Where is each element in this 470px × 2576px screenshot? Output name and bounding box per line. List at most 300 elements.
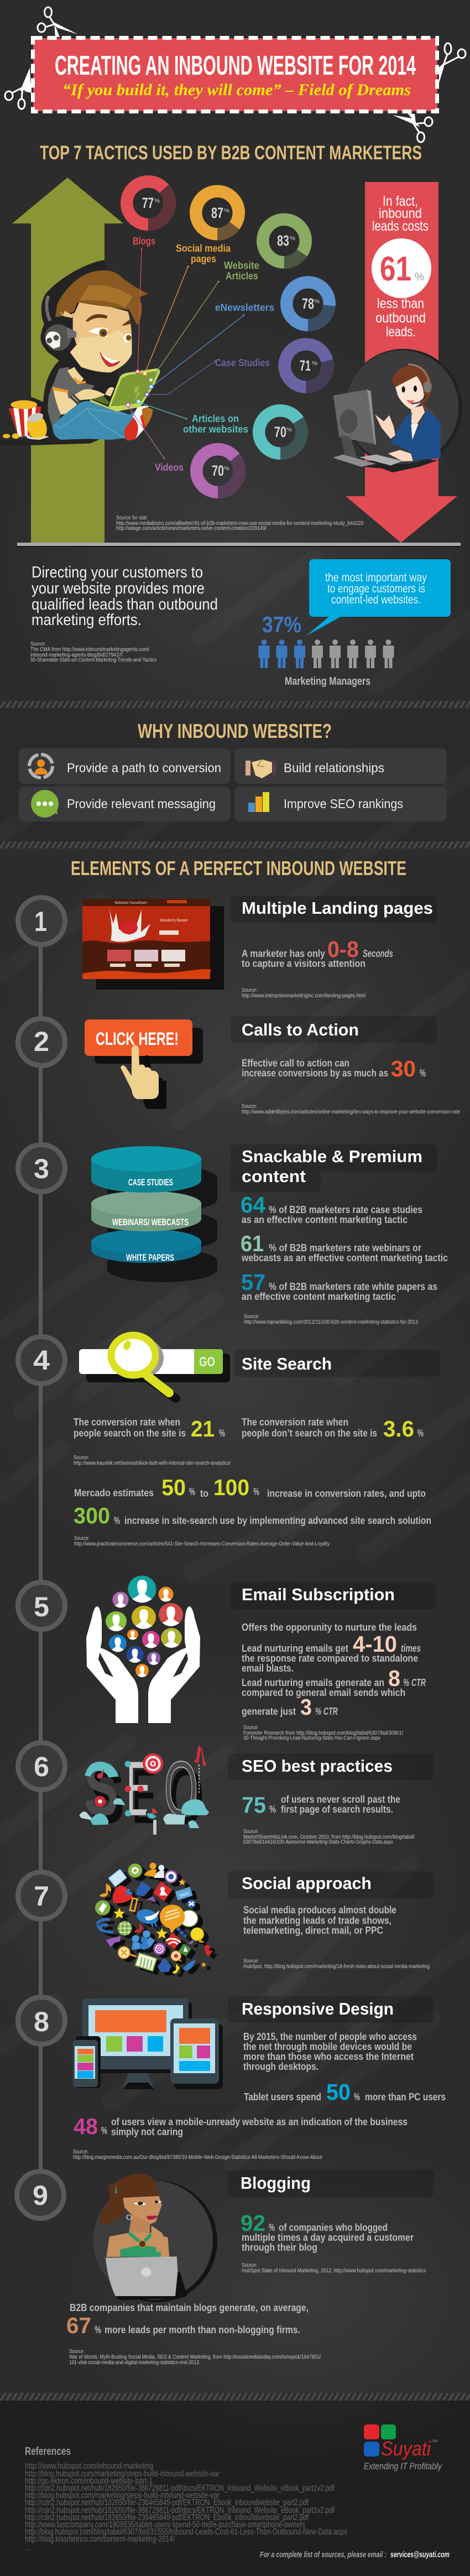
email stats: times (401, 1643, 421, 1654)
tactic labels: Videos (155, 462, 184, 473)
source: CMA: 55-Shareable-Stats-on-Content-Marketing-Trends-and-Tactics (30, 657, 156, 663)
tactic labels: Case Studies (215, 357, 270, 368)
stat: 50 percent: Tablet users spend (244, 2091, 321, 2103)
tagline: “If you build it, they will come” – Field of Dreams (62, 81, 411, 99)
references list: http://cdn2.hubspot.net/hub/182650/file-236465849-pdf/EKTRON_Ebook_inboundwebsite_part2.pdf (25, 2498, 309, 2507)
source (243, 1829, 415, 1845)
stat: 300 percent: % (114, 1515, 120, 1526)
stat: mercado estimates: Mercado estimates (74, 1487, 154, 1498)
email stats: the response rate compared to standalone (242, 1653, 418, 1664)
social icons cluster (95, 1862, 213, 1974)
panel: path to conversion: Provide a path to conversion (67, 761, 221, 775)
email stats: % CTR (403, 1677, 426, 1688)
tactic labels: eNewsletters (215, 302, 274, 313)
SEO illustration (79, 1745, 209, 1835)
source: 6307/bid/14416/100-Awesome-Marketing-Stats-Charts-Graphs-Data.aspx (243, 1839, 393, 1845)
directing customers text: Directing your customers to (32, 564, 203, 581)
speech bubble: the most important way (325, 571, 427, 584)
stat: 3.6 percent: % (417, 1428, 424, 1439)
stat: 21 percent: The conversion rate when (74, 1417, 180, 1428)
stat: 67 percent: 67 (66, 2313, 91, 2338)
stat: 67 percent: B2B companies that maintain blogs generate, on average, (70, 2302, 309, 2313)
heading panel (228, 1996, 434, 2023)
Suyati logo: SM (432, 2440, 437, 2443)
stat: 92 percent (241, 2210, 414, 2253)
references list: http://www.hubspot.com/inbound-marketing (25, 2461, 153, 2471)
source: Source: (69, 2349, 85, 2355)
panel: build relationships (234, 748, 447, 784)
source: Source: (243, 1725, 259, 1731)
source for stat: http://adage.com/article/news/marketers-solve-content-creation/239149/ (116, 525, 267, 532)
stat: 57 percent (241, 1269, 437, 1302)
tactic labels (133, 236, 274, 473)
panel: SEO rankings (234, 787, 447, 821)
stacked content cylinders (91, 1146, 201, 1263)
email stats: Offers the opporunity to nurture the leads (242, 1622, 417, 1633)
jeans (53, 401, 140, 440)
email stats: generate just (242, 1706, 296, 1717)
heading panel (234, 1350, 440, 1377)
stacked content cylinders: CASE STUDIES (128, 1177, 173, 1188)
stat: 64 percent (241, 1192, 422, 1225)
source: Source: (243, 1829, 259, 1835)
speech bubble: content-led websites. (331, 594, 421, 606)
37% marketing managers pictogram: 37% (262, 612, 301, 637)
heading panel (231, 1016, 437, 1043)
icon: rising bars (248, 792, 269, 812)
mobile text: By 2015, the number of people who access (243, 2031, 417, 2042)
stat: 75 percent: % (269, 1804, 276, 1815)
icon: conversion cycle (29, 754, 53, 778)
hands holding subscribers (86, 1575, 200, 1723)
step marker 9: 9 (33, 2180, 48, 2211)
stat: 64 percent: as an effective content marketing tactic (242, 1214, 408, 1225)
landing page screenshot: Strawberry Heaven (160, 918, 187, 923)
source (69, 2349, 321, 2366)
stat: 92 percent: through their blog (242, 2242, 317, 2253)
section 5: email subscription (86, 1575, 436, 1741)
source (242, 1104, 460, 1115)
references list: http://cdn2.hubspot.net/hub/182650/file-386729811-pdf/docs/EKTRON_Inbound_Website_eBook_part1v2.pdf (25, 2506, 335, 2515)
stat: 61 percent: 61 (241, 1231, 264, 1256)
red down arrow with copy (346, 182, 457, 543)
stat: 64 percent: % of B2B marketers rate case studies (269, 1204, 422, 1215)
section 6: SEO best practices (79, 1745, 434, 1845)
stat: 0-8 seconds: to capture a visitors attention (242, 958, 365, 969)
source: http://www.toprankblog.com/2012/11/100-b2b-content-marketing-statistics-for-2013 (244, 1319, 418, 1325)
stat: 3.6 percent: 3.6 (383, 1416, 414, 1441)
heading panel: Social approach (242, 1874, 372, 1893)
source: Source: (73, 2149, 88, 2155)
source: 30-Thought-Provoking-Lead-Nurturing-Stats-You-Can-t-Ignore.aspx (243, 1735, 380, 1741)
heading panel (231, 896, 437, 923)
devices illustration (73, 1999, 223, 2089)
step marker 5 (18, 1582, 65, 1630)
section 4: site search (74, 1335, 440, 1547)
email stats: 8 (388, 1666, 400, 1691)
step marker 3: 3 (34, 1153, 49, 1184)
donut: other websites 70% (259, 410, 302, 454)
title banner (33, 38, 437, 112)
stat: 75 percent: 75 (242, 1792, 266, 1818)
section 8: responsive design (73, 1996, 446, 2161)
source (74, 1536, 330, 1547)
heading panel: Multiple Landing pages (242, 898, 433, 918)
tactic labels: pages (191, 253, 216, 264)
references list: http://blog.hubspot.com/blog/tabid/6307/bid/31555/Inbound-Leads-Cost-61-Less-Than-Outbound-New-Data.aspx (25, 2527, 347, 2537)
stat: 0-8 seconds (242, 936, 393, 969)
stat: mercado estimates: increase in conversion rates, and upto (267, 1488, 426, 1499)
SEO illustration: E (126, 1745, 151, 1832)
references list: http://blog.hubspot.com/marketing/steps-build-inbound-website-var (25, 2469, 220, 2479)
donut: other websites 70%: % (286, 427, 292, 433)
step marker 7 (18, 1872, 65, 1919)
stat: 75 percent: of users never scroll past the (281, 1794, 400, 1805)
stat: 57 percent: % of B2B marketers rate white papers as (269, 1281, 437, 1292)
donut: case studies 71%: 71 (300, 357, 311, 374)
stat: 30 percent: Effective call to action can (242, 1058, 349, 1069)
source: CMA: Source: (30, 641, 46, 647)
t-shirt (48, 367, 95, 431)
click here button (85, 1019, 203, 1099)
references list: http://cdn2.hubspot.net/hub/182650/file-236465849-pdf/EKTRON_Ebook_inboundwebsite_part2.pdf (25, 2513, 309, 2522)
stat: 48 percent: % (101, 2125, 107, 2136)
search bar and magnifier (79, 1335, 230, 1398)
leader lines with connector dots (126, 248, 244, 459)
source (242, 2262, 426, 2274)
section 1: multiple landing pages (82, 896, 437, 999)
donut: enewsletters 78% (286, 282, 330, 325)
stat: 30 percent: % (420, 1068, 426, 1079)
step marker 3 (18, 1145, 65, 1191)
stat: 0-8 seconds: 0-8 (327, 936, 359, 962)
social text (243, 1904, 396, 1936)
popcorn (9, 407, 41, 437)
donut: blogs 77%: 77 (142, 195, 154, 211)
stat: 30 percent (242, 1056, 426, 1081)
email stats: email blasts. (242, 1663, 294, 1674)
social text: Social media produces almost double (243, 1904, 396, 1916)
timeline spine (39, 921, 43, 2195)
stat: mercado estimates: to (200, 1488, 208, 1499)
source: Source: (243, 1958, 259, 1964)
stat: 50 percent: 50 (326, 2079, 351, 2105)
stat: 92 percent: multiple times a day acquired a customer (242, 2232, 414, 2243)
source (244, 1314, 418, 1325)
step marker 2 (18, 1019, 65, 1065)
step marker 9 (17, 2172, 64, 2218)
boy with laptop illustration (0, 260, 160, 445)
stat: 92 percent: of companies who blogged (279, 2222, 388, 2233)
source (73, 2149, 322, 2161)
heading panel: Email Subscription (242, 1585, 395, 1604)
step marker 8: 8 (34, 2006, 49, 2037)
green up arrow (12, 178, 123, 543)
tactic labels: Articles (226, 270, 258, 282)
step marker 5: 5 (34, 1591, 49, 1622)
source (242, 987, 365, 999)
source: http://blog.marginmedia.com.au/Our-Blog/bid/87385/10-Mobile-Web-Design-Statistics-All-Marketers-Should-Know-About (73, 2155, 322, 2161)
donut: videos 70%: 70 (212, 462, 224, 479)
stat: 3.6 percent (242, 1416, 424, 1441)
step marker 2: 2 (34, 1026, 49, 1057)
section 9: blogging (66, 2170, 434, 2366)
speech bubble: to engage customers is (327, 582, 425, 595)
stat: 75 percent: first page of search results. (281, 1804, 393, 1815)
heading panel (228, 1753, 434, 1780)
icon: handshake (246, 759, 276, 778)
source: Source: (242, 1104, 257, 1110)
stat: 0-8 seconds: Seconds (363, 948, 393, 959)
landing page screenshot (82, 899, 224, 990)
donut: case studies 71%: % (312, 361, 317, 367)
heading panel: Calls to Action (242, 1020, 359, 1039)
directing customers text: marketing efforts. (32, 611, 142, 629)
stat: 21 percent (74, 1416, 225, 1441)
inbound leads text (372, 194, 429, 340)
stat: 3.6 percent: The conversion rate when (242, 1417, 348, 1428)
stat: 67 percent: % (95, 2324, 101, 2335)
Suyati logo: Suyati (381, 2437, 431, 2460)
tactic labels: other websites (183, 424, 248, 435)
stat: 75 percent (242, 1792, 400, 1818)
stat: mercado estimates: 100 (213, 1475, 249, 1500)
references list: ... (25, 2543, 30, 2552)
stat: 48 percent: simply not caring (111, 2126, 183, 2137)
stat: 30 percent: increase conversions by as much as (242, 1068, 388, 1079)
stat: 48 percent: of users view a mobile-unready website as an indication of the business (111, 2116, 408, 2127)
stat: 21 percent: people search on the site is (74, 1428, 186, 1439)
source: Source: (74, 1536, 90, 1542)
inbound leads text: inbound (379, 206, 422, 221)
source for stat: Source for stat: (116, 515, 148, 521)
scissors: left (5, 67, 32, 109)
step marker 6 (18, 1742, 65, 1790)
email stats: Lead nurturing emails generate an (242, 1677, 384, 1688)
email stats: 3 (300, 1694, 312, 1720)
heading panel: content (242, 1167, 306, 1186)
SEO illustration: S (84, 1745, 119, 1832)
source for stat: http://www.mediabistro.com/alltwitter/91-of-b2b-marketers-now-use-social-media-for-content-marketing-study_b44220 (116, 521, 363, 527)
heading: why inbound website: WHY INBOUND WEBSITE? (138, 720, 332, 742)
email stats: compared to general email sends which (242, 1687, 405, 1698)
inbound leads text: outbound (375, 310, 426, 326)
stat: 61 percent: % of B2B marketers rate webinars or (269, 1242, 421, 1253)
section 2: calls to action (85, 1016, 460, 1115)
references list: http://cdn2.hubspot.net/hub/182650/file-386729811-pdf/docs/EKTRON_Inbound_Website_eBook_part1v2.pdf (25, 2484, 335, 2493)
tactic labels: Blogs (133, 236, 155, 247)
references list: http://blog.hubspot.com/marketing/steps-build-inbound-website-var (25, 2491, 220, 2500)
email stats: % CTR (315, 1706, 338, 1717)
stat: 48 percent: 48 (74, 2114, 98, 2139)
grey floor line (17, 543, 461, 547)
source: War of Words: Myth-Busting Social Media, SEO & Content Marketing, from http://socialmediatoday.com/tomspick/1647801/ (69, 2354, 321, 2360)
donut: videos 70% (196, 449, 239, 492)
headband (46, 296, 50, 321)
source: http://www.kaushik.net/avinash/kick-butt-with-internal-site-search-analytics/ (74, 1460, 231, 1466)
heading panel (231, 1144, 437, 1192)
landing page screenshot: Valentine Sweetheart (114, 901, 148, 905)
61 percent badge: 61 (380, 250, 411, 288)
step marker 7: 7 (34, 1881, 49, 1912)
icon: pointing hand (121, 1045, 159, 1099)
source: MarketShareHitsLink.com, October 2010, from http://blog.hubspot.com/blog/tabid/ (243, 1834, 415, 1840)
search bar and magnifier: GO (199, 1355, 215, 1370)
email stats (242, 1622, 426, 1720)
stat: mercado estimates: % (189, 1486, 195, 1497)
heading panel (228, 1871, 434, 1898)
step marker 8 (18, 1997, 65, 2044)
panel: SEO rankings: Improve SEO rankings (284, 797, 403, 811)
source (243, 1725, 403, 1741)
step marker 4: 4 (33, 1345, 50, 1376)
references list: http://blog.kissmetrics.com/content-marketing-2014/ (25, 2535, 175, 2544)
directing customers text (32, 564, 218, 629)
donut: other websites 70%: 70 (274, 424, 286, 440)
source: Source: (242, 987, 257, 993)
donut: blogs 77%: % (154, 198, 160, 204)
mobile text: through desktops. (243, 2061, 318, 2072)
mobile text: more than those who access the Internet (243, 2051, 414, 2062)
source: HubSpot, http://blog.hubspot.com/marketing/18-fresh-stats-about-social-media-marketing (243, 1964, 430, 1970)
can (24, 411, 50, 443)
panel: relevant messaging: Provide relevant messaging (67, 797, 216, 811)
SEO illustration: O (164, 1745, 198, 1832)
mobile text (243, 2031, 417, 2072)
stat: 21 percent: % (219, 1428, 225, 1439)
step marker 4 (18, 1336, 65, 1384)
scissors: top (38, 7, 78, 37)
step marker 1: 1 (34, 906, 47, 937)
donut: social media 87%: 87 (211, 205, 223, 221)
contact line: For a complete list of sources, please email : (260, 2550, 387, 2559)
speech bubble (306, 559, 451, 636)
source: HubSpot State of Inbound Marketing, 2012, http://www.hubspot.com/marketing-statistics (242, 2268, 426, 2274)
stat: 50 percent: more than PC users (365, 2091, 446, 2103)
stacked content cylinders: WEBINARS/ WEBCASTS (112, 1217, 189, 1227)
social text: telemarketing, direct mail, or PPC (243, 1925, 383, 1936)
source: Source: (242, 2262, 257, 2268)
donut: videos 70%: % (224, 466, 229, 472)
woman blogger illustration (93, 2174, 217, 2302)
donut: website articles 83%: 83 (277, 232, 289, 249)
37% marketing managers pictogram: Marketing Managers (285, 675, 370, 688)
step marker 6: 6 (34, 1751, 49, 1782)
laptop (90, 399, 142, 412)
Suyati logo: Extending IT Profitably (364, 2461, 442, 2471)
stat: mercado estimates (74, 1475, 426, 1500)
stat: mercado estimates: % (253, 1486, 259, 1497)
donut: case studies 71% (285, 344, 327, 387)
source (74, 1455, 231, 1466)
donut: website articles 83% (263, 220, 306, 262)
tactic labels: Articles on (192, 413, 239, 424)
stat: 92 percent: 92 (241, 2210, 265, 2236)
tactic labels: Social media (176, 243, 231, 254)
37% marketing managers pictogram (259, 612, 394, 688)
email stats: 4-10 (353, 1631, 397, 1657)
references list (25, 2445, 347, 2552)
donut: social media 87% (196, 191, 239, 234)
step marker 1 (18, 897, 65, 945)
61 percent badge: % (415, 271, 424, 283)
donut: website articles 83%: % (290, 236, 295, 242)
stat: 67 percent (66, 2302, 309, 2338)
section 7: social approach (95, 1862, 434, 1974)
stat: 61 percent: webcasts as an effective content marketing tactic (241, 1252, 448, 1263)
source: CMA: The CMA from http://www.inboundmarketingagents.com/ (30, 647, 149, 653)
donut: blogs 77% (127, 181, 170, 225)
stat: 21 percent: 21 (191, 1416, 215, 1441)
email stats: Lead nurturing emails get (242, 1643, 348, 1654)
stat: 300 percent (74, 1503, 431, 1528)
scissors: bottom (393, 113, 432, 142)
heading panel (230, 1582, 436, 1609)
call-centre agent illustration (333, 349, 462, 472)
scissors: right (439, 43, 466, 83)
Suyati logo (364, 2424, 442, 2471)
stat: 3.6 percent: people don’t search on the site is (242, 1428, 377, 1439)
stat: 0-8 seconds: A marketer has only (242, 948, 325, 959)
stat: 300 percent: 300 (74, 1503, 110, 1528)
sneaker (124, 407, 153, 441)
panel: relevant messaging (19, 787, 231, 821)
tactic labels: Website (224, 260, 259, 271)
stat: 50 percent (244, 2079, 446, 2105)
mobile text: the net through mobile devices would be (243, 2041, 412, 2052)
stacked content cylinders: WHITE PAPERS (126, 1252, 174, 1263)
source for stat (116, 515, 363, 532)
stat: 48 percent (74, 2114, 408, 2139)
heading panel: SEO best practices (242, 1756, 393, 1776)
donut: social media 87%: % (224, 208, 229, 214)
donut: enewsletters 78%: % (314, 299, 320, 305)
icon: chat bubble (31, 790, 59, 818)
heading panel: Responsive Design (242, 1999, 394, 2018)
social icons cluster: SMS (179, 1890, 190, 1899)
headphones (40, 321, 75, 353)
stat: 50 percent: % (354, 2091, 360, 2103)
stat: 300 percent: increase in site-search use by implementing advanced site search solution (124, 1515, 431, 1526)
source (243, 1958, 430, 1970)
stat: 57 percent: an effective content marketing tactic (242, 1291, 396, 1302)
heading panel (228, 2170, 434, 2197)
inbound leads text: In fact, (383, 194, 418, 209)
references list: http://go.ektron.com/inbound-website-part-1 (25, 2476, 153, 2486)
directing customers text: qualified leads than outbound (32, 596, 218, 613)
inbound leads text: leads. (386, 324, 416, 340)
source: Source: (74, 1455, 89, 1461)
section 3: snackable and premium content (91, 1144, 448, 1325)
source: Forrester Research from http://blog.hubspot.com/blog/tabid/6307/bid/30901/ (243, 1730, 403, 1736)
inbound leads text: leads costs (372, 218, 429, 234)
source: http://www.practicalecommerce.com/articles/541-Site-Search-Increases-Conversion-Rates-Average-Order-Value-And-Loyalty (74, 1541, 330, 1547)
source: http://www.interactivemarketinginc.com/landing-pages.html (242, 993, 365, 999)
source: CMA (30, 641, 156, 663)
panel: path to conversion (19, 748, 231, 784)
click here button: CLICK HERE! (96, 1029, 179, 1049)
heading panel: Snackable & Premium (242, 1147, 422, 1166)
stat: 61 percent (241, 1231, 448, 1263)
61 percent badge (372, 238, 431, 298)
donut: enewsletters 78%: 78 (302, 295, 314, 312)
source: CMA: inbound-marketing-agents-blog/bid/279437/ (30, 652, 123, 658)
stat: mercado estimates: 50 (161, 1475, 186, 1500)
stat: 67 percent: more leads per month than non-blogging firms. (105, 2324, 300, 2335)
stat: 30 percent: 30 (391, 1056, 416, 1081)
references list: References (25, 2445, 71, 2458)
stat: 92 percent: % (269, 2222, 275, 2233)
